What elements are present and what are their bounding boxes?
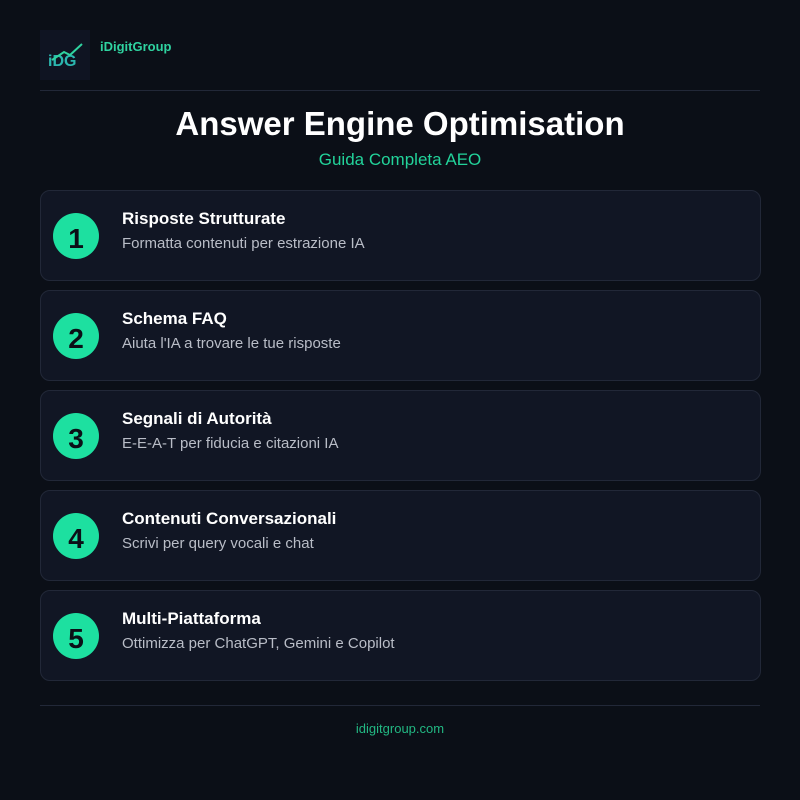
card 5: Ottimizza per ChatGPT, Gemini e Copilot xyxy=(122,635,395,652)
subtitle: Guida Completa AEO xyxy=(319,150,481,169)
card 4: Scrivi per query vocali e chat xyxy=(122,535,314,552)
card 3 xyxy=(40,390,761,481)
card 1 xyxy=(40,190,761,281)
title: Answer Engine Optimisation xyxy=(175,105,625,142)
card 4: 4 xyxy=(68,523,84,554)
card 4 xyxy=(40,490,761,581)
card 5 xyxy=(40,590,761,681)
card 1: 1 xyxy=(68,223,84,254)
card 2 xyxy=(40,290,761,381)
card 1: Risposte Strutturate xyxy=(122,209,285,228)
card 4: Contenuti Conversazionali xyxy=(122,509,336,528)
card 3: Segnali di Autorità xyxy=(122,409,272,428)
card 2: Aiuta l'IA a trovare le tue risposte xyxy=(122,335,341,352)
card 5: 5 xyxy=(68,623,84,654)
card 5: Multi-Piattaforma xyxy=(122,609,261,628)
logo xyxy=(40,30,90,80)
card 2: Schema FAQ xyxy=(122,309,227,328)
card 3: E-E-A-T per fiducia e citazioni IA xyxy=(122,435,338,452)
card 3: 3 xyxy=(68,423,84,454)
brand name: iDigitGroup xyxy=(100,39,172,54)
card 1: Formatta contenuti per estrazione IA xyxy=(122,235,365,252)
footer: idigitgroup.com xyxy=(356,721,444,736)
card 2: 2 xyxy=(68,323,84,354)
logo: iDG xyxy=(48,53,76,70)
